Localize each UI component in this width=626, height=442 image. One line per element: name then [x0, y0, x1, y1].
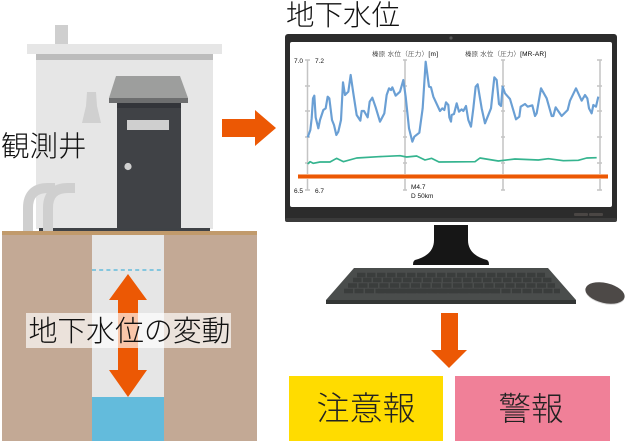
chart: water level time series: 7.2: [315, 58, 324, 65]
chart: water level time series: [294, 49, 608, 200]
panel: observation well building: [27, 25, 222, 232]
panel: ground cross-section: [2, 231, 257, 441]
chart: water level time series: 6.7: [315, 188, 324, 195]
arrow: monitor to alerts: [431, 313, 467, 368]
chart: water level time series: 6.5: [294, 188, 303, 195]
text block: groundwater level change: 地下水位の変動: [28, 315, 230, 348]
mouse: [583, 279, 626, 308]
chart: water level time series: 7.0: [294, 58, 303, 65]
chart: water level time series: M4.7: [411, 184, 426, 191]
panel: advisory: 注意報: [316, 390, 416, 427]
chart: water level time series: 榛原 水位（圧力）[m]: [372, 49, 438, 58]
panel: advisory: [289, 376, 443, 441]
panel: warning: [455, 376, 610, 441]
panel: warning: 警報: [498, 391, 564, 427]
arrow: well to monitor: [222, 110, 276, 146]
chart: water level time series: 榛原 水位（圧力）[MR-AR]: [465, 49, 546, 58]
heading: observation well: 観測井: [1, 131, 87, 163]
heading: groundwater level: 地下水位: [286, 0, 400, 32]
arrow: water level change: [109, 274, 147, 397]
chart: water level time series: D 50km: [411, 193, 433, 200]
monitor stand: [413, 225, 489, 265]
monitor: [285, 34, 617, 222]
keyboard: [326, 268, 576, 304]
